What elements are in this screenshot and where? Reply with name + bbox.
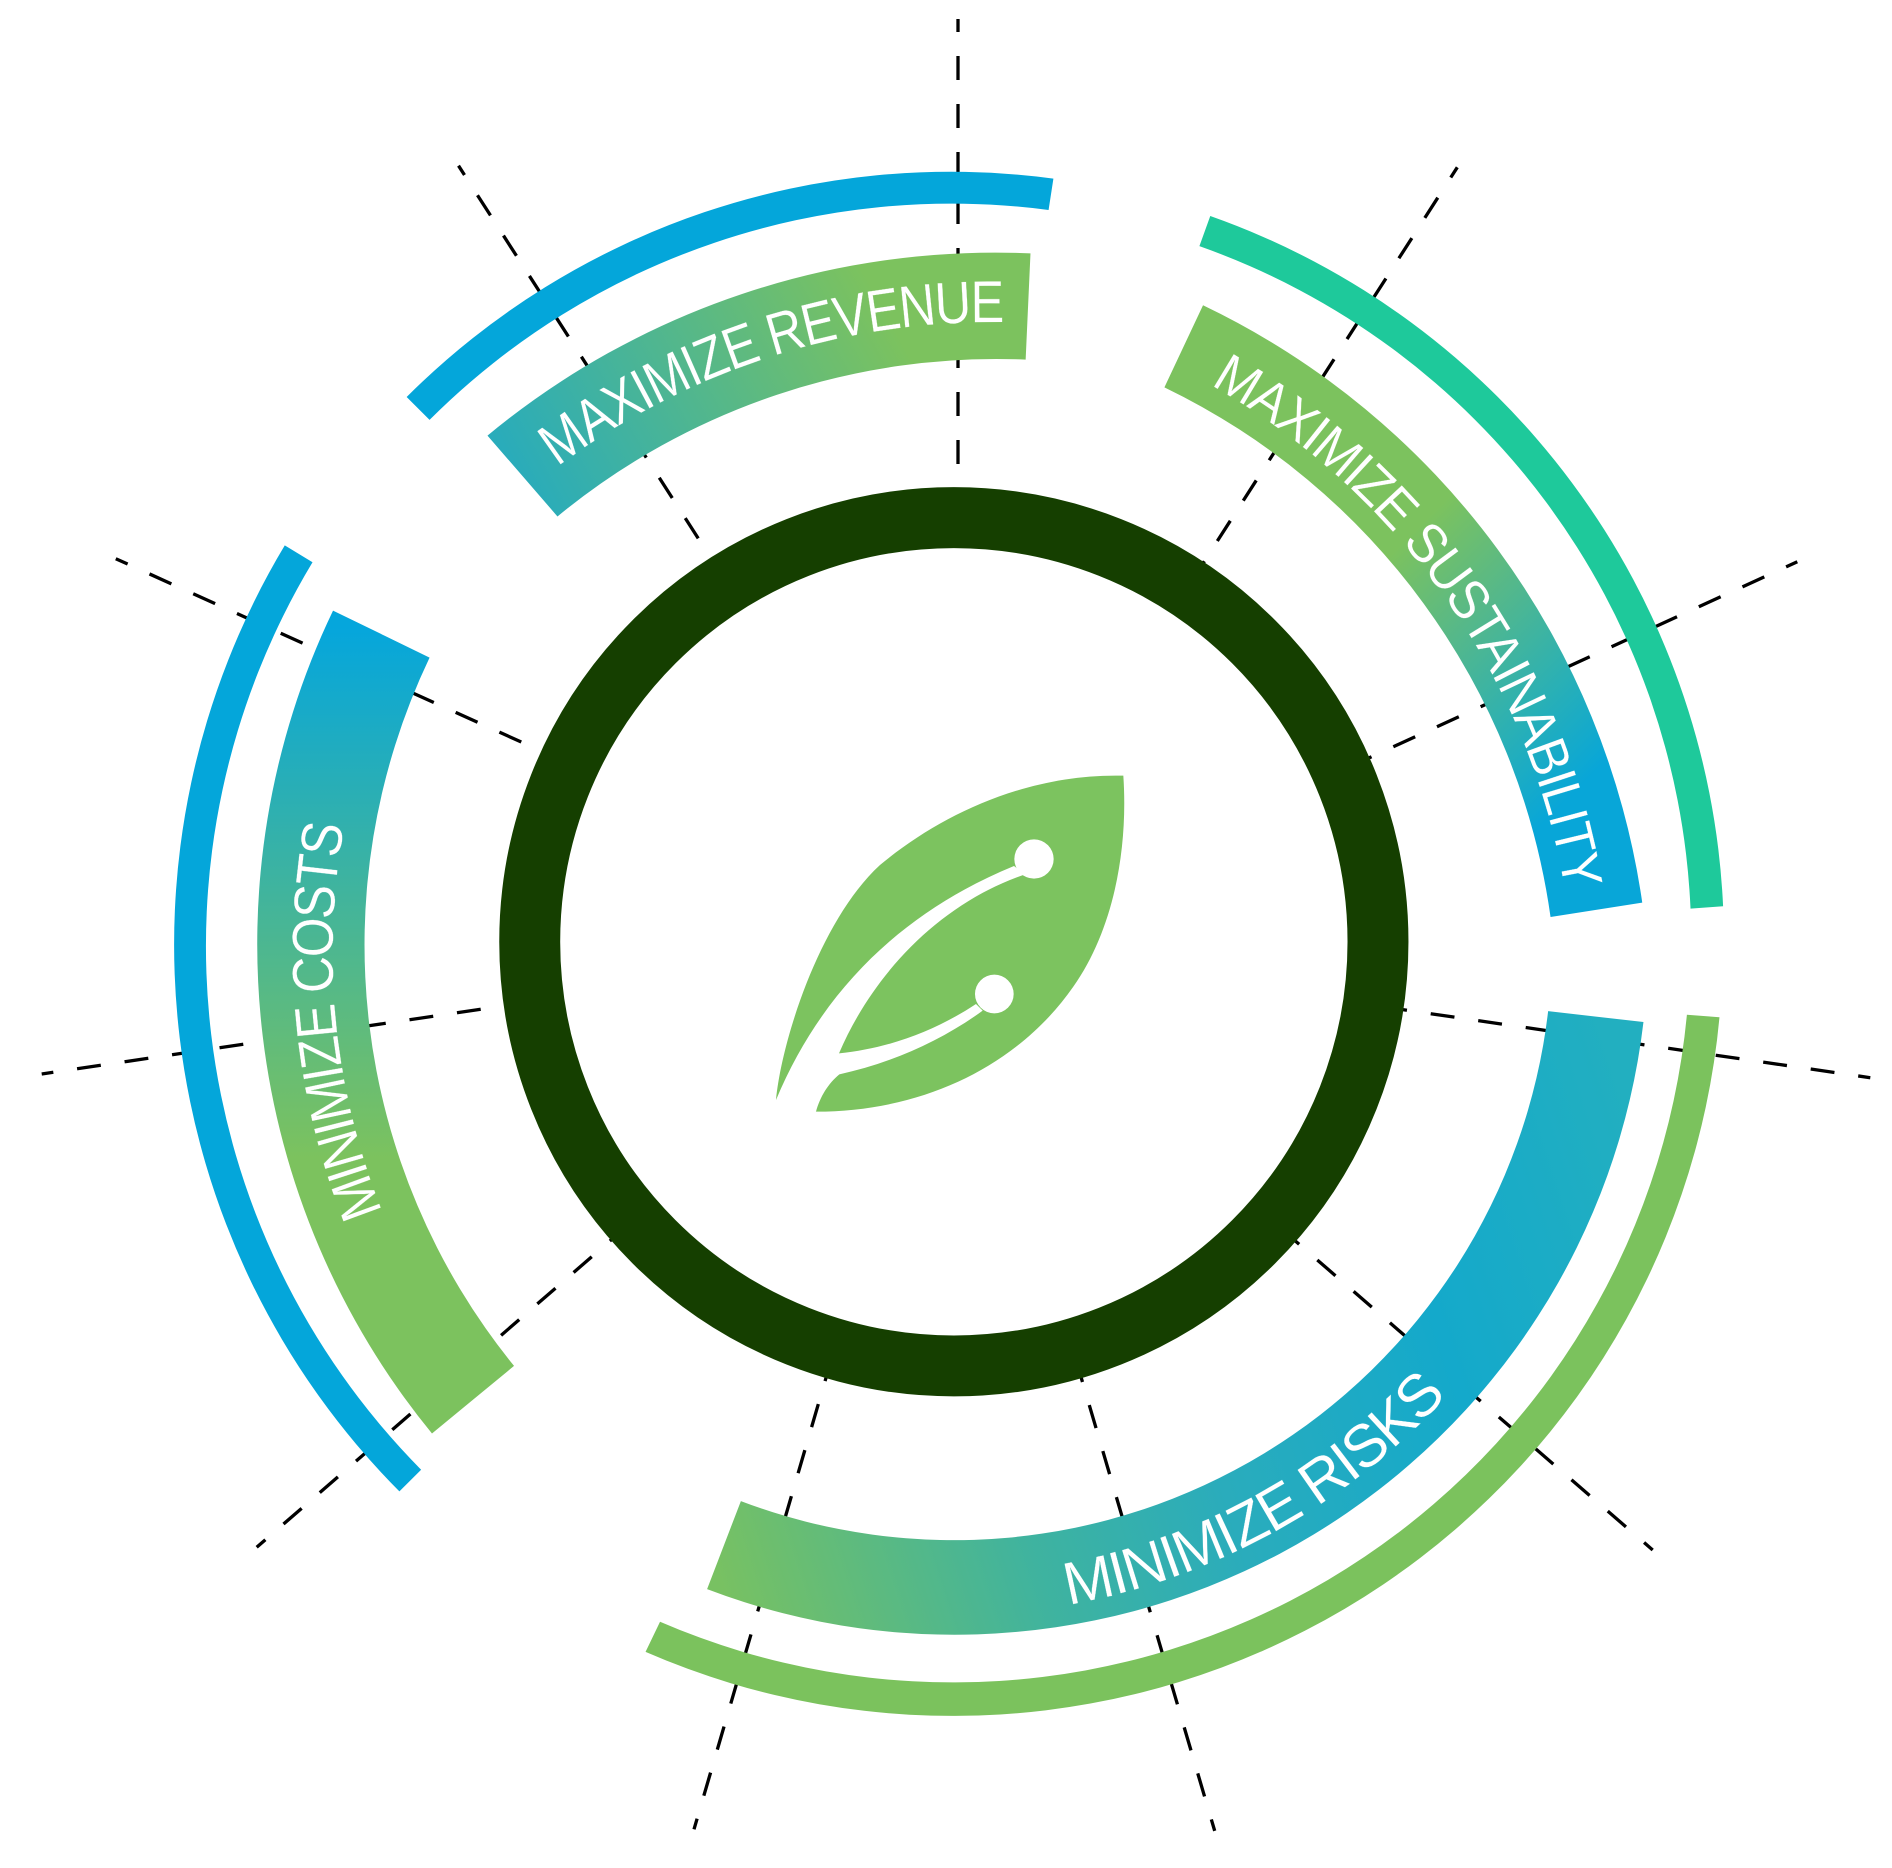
panel: minimize risks <box>707 1011 1644 1635</box>
arc: outer blue top <box>407 172 1053 420</box>
panel: maximize sustainability <box>1164 305 1642 917</box>
center ring <box>530 518 1378 1366</box>
panel: minimize costs <box>257 610 514 1434</box>
arc: outer blue left <box>174 545 421 1491</box>
label: maximize revenue: MAXIMIZE REVENUE <box>537 281 1002 464</box>
icon: leaf <box>773 776 1124 1113</box>
label: minimize risks: MINIMIZE RISKS <box>1064 1374 1441 1604</box>
arc: outer green bottom <box>646 1015 1719 1716</box>
label: maximize sustainability: MAXIMIZE SUSTAINABILITY <box>1214 354 1602 882</box>
arc: outer teal right <box>1199 216 1723 909</box>
panel: maximize revenue <box>488 252 1030 516</box>
label: minimize costs: MINIMIZE COSTS <box>292 824 381 1222</box>
